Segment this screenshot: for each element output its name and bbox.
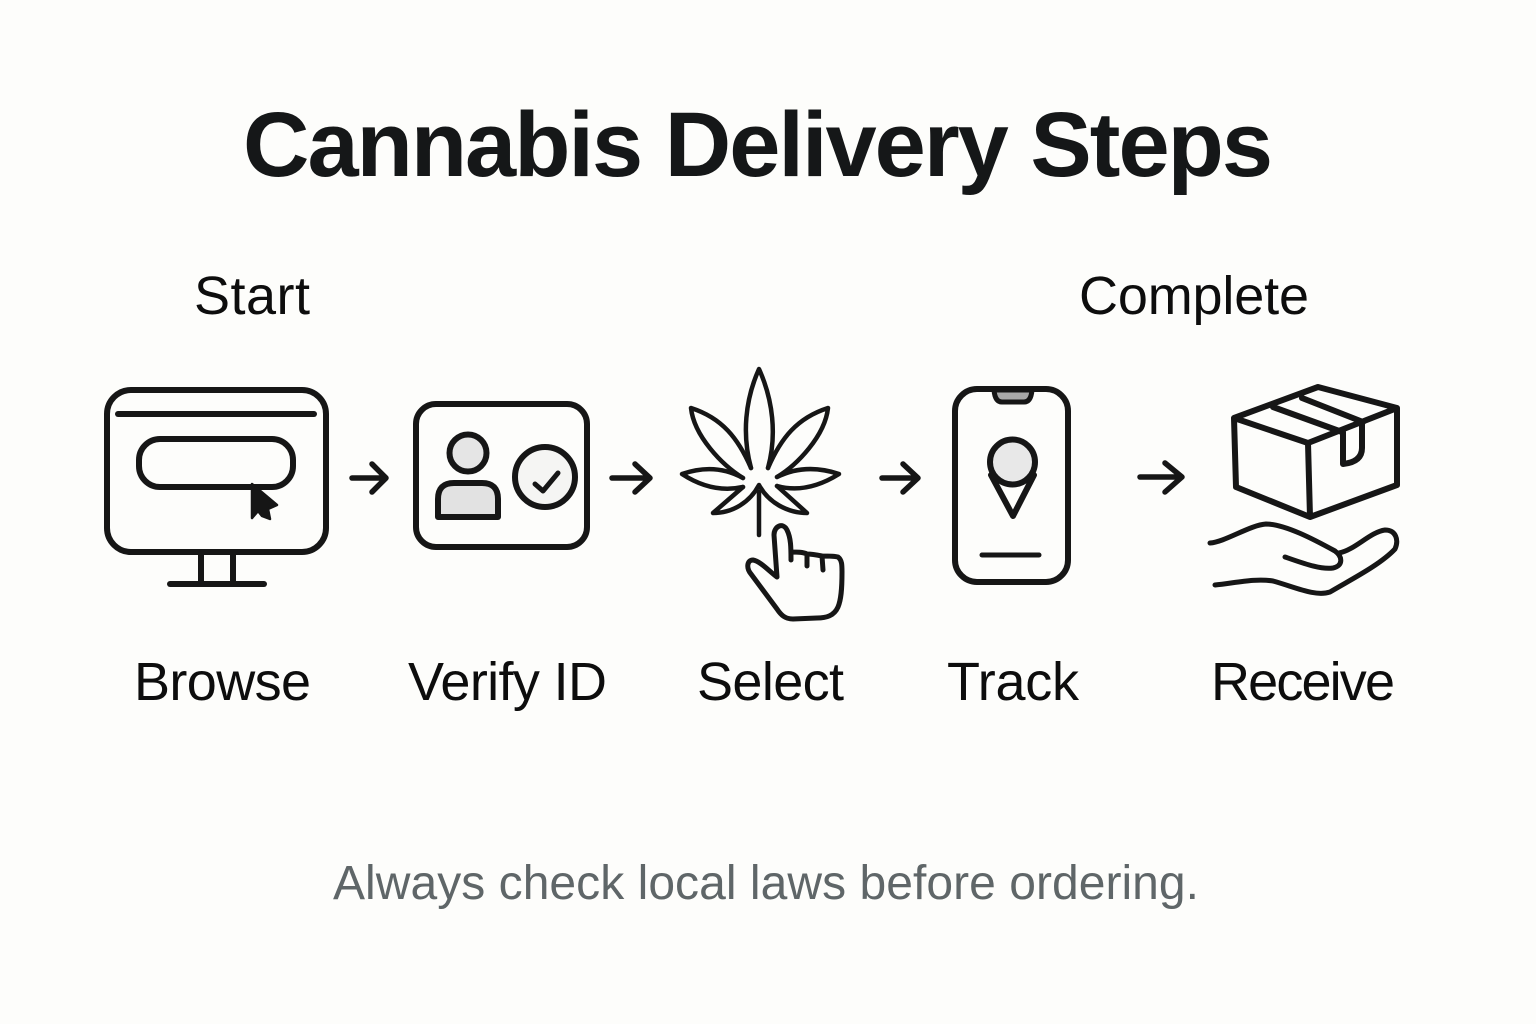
- label: browse: Browse: [134, 652, 311, 712]
- start label: Start: [194, 266, 310, 326]
- arrow: browse to verify: [352, 464, 386, 492]
- icon: cannabis leaf: [682, 369, 839, 535]
- arrow: select to track: [882, 464, 918, 492]
- footer note: Always check local laws before ordering.: [333, 857, 1199, 910]
- icon: package box: [1234, 387, 1397, 517]
- label: track: Track: [947, 652, 1080, 712]
- complete label: Complete: [1079, 266, 1309, 326]
- icon: pointing hand: [748, 526, 842, 619]
- label: select: Select: [697, 652, 844, 712]
- title: Cannabis Delivery Steps: [243, 94, 1273, 196]
- icon: browser on monitor: [107, 390, 326, 584]
- label: verify id: Verify ID: [408, 652, 607, 712]
- icon: ID card with check: [416, 404, 587, 547]
- label: receive: Receive: [1211, 652, 1395, 712]
- arrow: track to receive: [1140, 463, 1182, 492]
- icon: mouse cursor: [252, 484, 277, 519]
- icon: phone with location pin: [955, 389, 1068, 582]
- icon: open hand: [1210, 524, 1397, 593]
- arrow: verify to select: [612, 464, 650, 492]
